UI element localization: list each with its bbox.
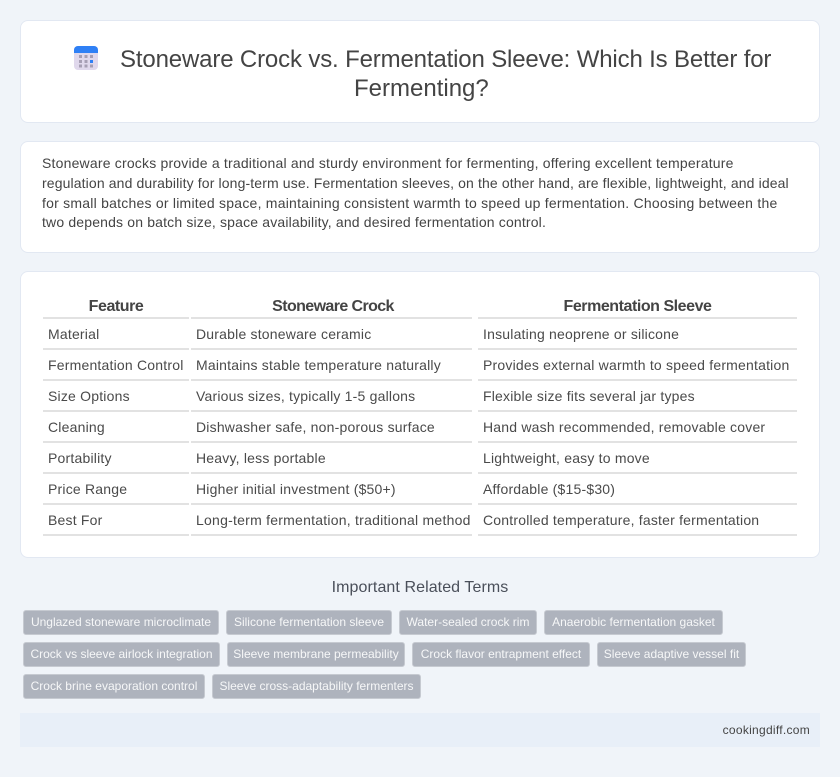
panel: title card <box>20 20 820 123</box>
comparison table: Insulating neoprene or silicone <box>483 326 679 342</box>
comparison table: Heavy, less portable <box>196 450 326 466</box>
row: Material: Material <box>48 326 99 342</box>
comparison table: Provides external warmth to speed fermentation <box>483 357 789 373</box>
icon: calendar <box>74 46 98 70</box>
comparison table: Affordable ($15-$30) <box>483 481 615 497</box>
title <box>120 46 771 102</box>
footer bar <box>20 713 820 747</box>
row: Best For: Best For <box>48 512 103 528</box>
intro text: Stoneware crocks provide a traditional and sturdy environment for fermenting, offering excellent temperature <box>42 155 734 171</box>
panel: comparison table card <box>20 271 820 558</box>
tag <box>23 610 219 635</box>
row: Cleaning: Cleaning <box>48 419 105 435</box>
intro text: two depends on batch size, space availability, and desired fermentation control. <box>42 214 546 230</box>
tag: Unglazed stoneware microclimate <box>31 615 211 629</box>
footer: site name: cookingdiff.com <box>723 723 810 737</box>
tag: Crock flavor entrapment effect <box>421 647 581 661</box>
intro text: regulation and durability for long-term use. Fermentation sleeves, on the other hand, are flexible, lightweight, and ideal <box>42 175 789 191</box>
comparison table: Flexible size fits several jar types <box>483 388 695 404</box>
tag <box>227 642 405 667</box>
tag: Sleeve membrane permeability <box>233 647 399 661</box>
tag: Silicone fermentation sleeve <box>234 615 384 629</box>
comparison table: Dishwasher safe, non-porous surface <box>196 419 435 435</box>
header: Fermentation Sleeve: Fermentation Sleeve <box>564 298 711 315</box>
title: Stoneware Crock vs. Fermentation Sleeve: Which Is Better for <box>120 46 771 73</box>
tag: Sleeve adaptive vessel fit <box>604 647 739 661</box>
comparison table: Various sizes, typically 1-5 gallons <box>196 388 415 404</box>
header: Stoneware Crock: Stoneware Crock <box>272 298 394 315</box>
tag: Crock brine evaporation control <box>31 679 197 693</box>
comparison table: Lightweight, easy to move <box>483 450 650 466</box>
intro text: for small batches or limited space, maintaining consistent warmth to speed up fermentation. Choosing between the <box>42 195 777 211</box>
tag <box>226 610 392 635</box>
comparison table: Durable stoneware ceramic <box>196 326 371 342</box>
panel: introduction card <box>20 141 820 253</box>
row: Fermentation Control: Fermentation Control <box>48 357 184 373</box>
comparison table: Controlled temperature, faster fermentation <box>483 512 759 528</box>
header: Feature: Feature <box>89 298 143 315</box>
tag: Water-sealed crock rim <box>407 615 529 629</box>
comparison table: Long-term fermentation, traditional method <box>196 512 471 528</box>
tag <box>544 610 723 635</box>
comparison table: Higher initial investment ($50+) <box>196 481 396 497</box>
row: Price Range: Price Range <box>48 481 127 497</box>
comparison table: Maintains stable temperature naturally <box>196 357 441 373</box>
tag: Anaerobic fermentation gasket <box>552 615 715 629</box>
comparison table: Hand wash recommended, removable cover <box>483 419 765 435</box>
intro text <box>42 155 789 230</box>
tag <box>23 642 220 667</box>
tag <box>597 642 746 667</box>
row: Portability: Portability <box>48 450 112 466</box>
tag <box>399 610 537 635</box>
tag: Crock vs sleeve airlock integration <box>30 647 213 661</box>
heading: Important Related Terms: Important Related Terms <box>332 579 508 596</box>
tag <box>412 642 590 667</box>
tag <box>212 674 421 699</box>
title: Fermenting? <box>354 75 489 102</box>
tag list <box>23 610 746 699</box>
tag: Sleeve cross-adaptability fermenters <box>219 679 414 693</box>
comparison table <box>43 298 797 536</box>
row: Size Options: Size Options <box>48 388 130 404</box>
tag <box>23 674 205 699</box>
